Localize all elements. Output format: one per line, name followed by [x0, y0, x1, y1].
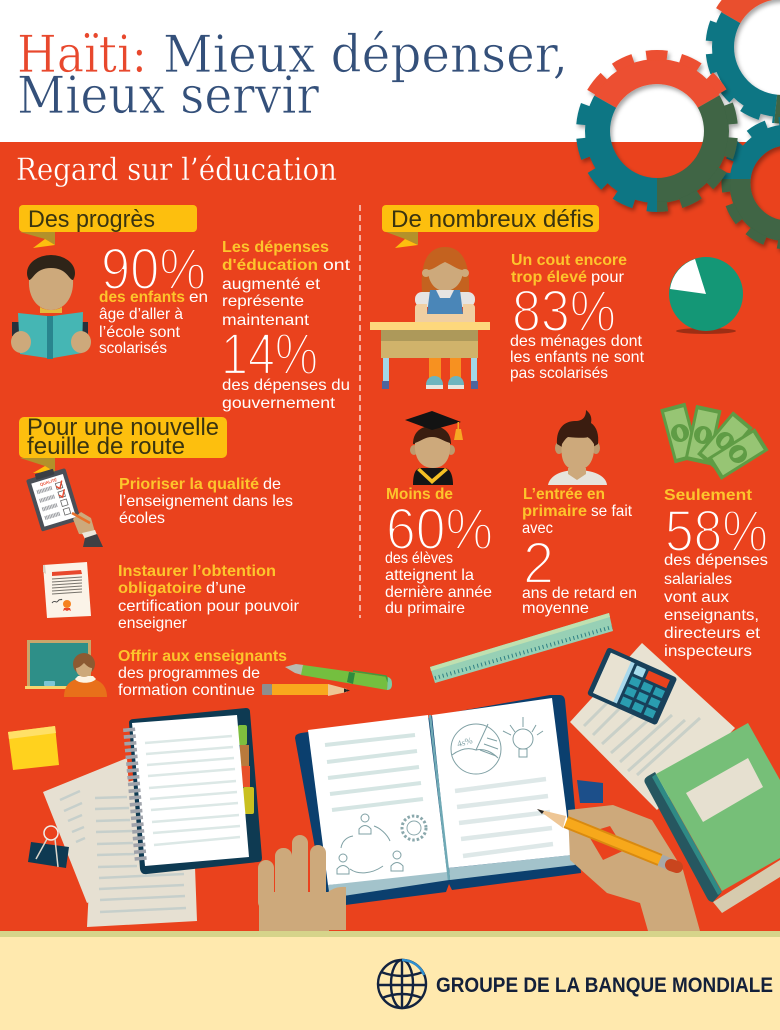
- stat: 14%: Les dépenses: [222, 239, 329, 256]
- icon: calculator: [587, 647, 677, 725]
- stat: 90%: scolarisés: [99, 340, 167, 357]
- stat: 2: se fait: [591, 503, 633, 520]
- stat: 58%: des dépenses: [664, 552, 768, 569]
- text: certification: enseigner: [118, 615, 188, 632]
- icon: green book: [644, 723, 780, 913]
- gear top right: [701, 0, 780, 128]
- gear main: [572, 46, 742, 216]
- sketch: people cycle: [337, 814, 403, 874]
- gear lower right: [718, 113, 780, 253]
- stat: 14%: gouvernement: [222, 395, 336, 412]
- stat: 14%: augmenté et: [222, 276, 321, 293]
- text: formation continue: formation continue: [118, 682, 255, 699]
- heading: Pour une nouvelle feuille de route: feuille de route: [27, 433, 185, 460]
- text: certification: certification pour pouvoir: [118, 598, 300, 615]
- stat: 58%: enseignants,: [664, 607, 759, 624]
- icon: checklist clipboard: QUALITÉ: [39, 477, 58, 487]
- stat: 60%: des élèves: [385, 550, 453, 567]
- stat: 14%: [221, 239, 351, 412]
- stat: 2: L’entrée en: [523, 486, 605, 503]
- icon: spiral notebook: [129, 708, 262, 874]
- stat: 90%: en: [189, 289, 208, 306]
- icon: teacher at blackboard: [25, 640, 107, 697]
- heading: De nombreux défis: De nombreux défis: [391, 206, 594, 233]
- stat: 58%: 58%: [665, 499, 768, 564]
- icon: girl at desk: [370, 247, 490, 389]
- stat: 60%: atteignent la: [385, 567, 474, 584]
- stat: 14%: ont: [323, 257, 351, 274]
- orange main background: [0, 142, 780, 931]
- icon: yellow pencil: [262, 684, 350, 696]
- text: priorité qualité: [119, 476, 293, 527]
- heading: Des progrès: Des progrès: [28, 206, 155, 233]
- stat: 83%: trop élevé: [511, 269, 587, 286]
- icon: left hand: [258, 835, 346, 931]
- stat: 14%: maintenant: [222, 312, 310, 329]
- stat: 58%: vont aux: [664, 589, 729, 606]
- stat: 2: primaire: [522, 503, 587, 520]
- icon: boy: [548, 410, 607, 485]
- text: certification: d’une: [206, 580, 246, 597]
- stat: 14%: d'éducation: [222, 257, 318, 274]
- stat: 90%: [99, 237, 208, 357]
- stat: 14%: représente: [222, 293, 304, 310]
- icon: boy reading: [11, 255, 91, 359]
- title: [17, 26, 568, 126]
- sketch: lightbulb: [503, 717, 543, 757]
- stat: 60%: dernière année: [385, 584, 492, 601]
- pie chart: 83%: [669, 257, 743, 334]
- stat: 58%: inspecteurs: [664, 643, 752, 660]
- text: certification: [118, 563, 300, 632]
- icon: globe: [378, 960, 426, 1008]
- stat: 60%: [385, 486, 493, 617]
- stat: 90%: âge d’aller à: [99, 306, 183, 323]
- icon: paper under calculator: [570, 643, 735, 810]
- stat: 58%: directeurs et: [664, 625, 761, 642]
- text: formation continue: Offrir aux enseignants: [118, 648, 287, 665]
- stat: 60%: Moins de: [386, 486, 453, 503]
- icon: checklist clipboard: [25, 465, 103, 547]
- icon: money: [660, 403, 769, 480]
- stat: 58%: Seulement: [664, 487, 752, 504]
- stat: 83%: pas scolarisés: [510, 365, 608, 382]
- divider: [359, 205, 361, 618]
- text: certification: Instaurer l’obtention: [118, 563, 276, 580]
- title: Haïti:: [17, 26, 147, 85]
- left page lines: [325, 735, 423, 810]
- stat: 58%: [664, 487, 768, 660]
- heading: Pour une nouvelle feuille de route: Pour une nouvelle: [27, 414, 219, 441]
- stat: 2: 2: [523, 531, 554, 596]
- text: formation continue: [118, 648, 287, 699]
- stat: 83%: pour: [591, 269, 625, 286]
- stat: 14%: des dépenses du: [222, 377, 350, 394]
- title: Mieux servir: [17, 67, 320, 126]
- icon: ruler: [430, 613, 613, 683]
- icon: green pen: [285, 664, 392, 690]
- stat: 83%: 83%: [512, 279, 616, 344]
- stat: 90%: 90%: [101, 237, 206, 302]
- stat: 2: avec: [522, 520, 553, 537]
- white header band: [0, 0, 780, 142]
- stat: 2: [522, 486, 637, 617]
- text: priorité qualité: l’enseignement dans les: [119, 493, 293, 510]
- heading: Pour une nouvelle feuille de route: [19, 414, 227, 473]
- heading: De nombreux défis: [382, 205, 599, 248]
- icon: open notebook: [295, 695, 603, 907]
- text: formation continue: des programmes de: [118, 665, 260, 682]
- stat: 2: moyenne: [522, 600, 589, 617]
- icon: gears: [572, 0, 780, 253]
- icon: loose papers: [43, 758, 197, 927]
- right page lines: [455, 779, 553, 856]
- title: Mieux dépenser,: [163, 26, 568, 85]
- stat: 60%: 60%: [386, 497, 493, 562]
- stat: 90%: l’école sont: [99, 324, 181, 341]
- footer logo: [378, 960, 773, 1008]
- stat: 83%: les enfants ne sont: [510, 349, 645, 366]
- text: priorité qualité: de: [263, 476, 281, 493]
- stat: 14%: 14%: [221, 322, 318, 387]
- stat: 83%: [510, 252, 645, 382]
- stat: 83%: Un cout encore: [511, 252, 627, 269]
- icon: graduate: [405, 411, 463, 485]
- text: certification: obligatoire: [118, 580, 202, 597]
- stat: 60%: du primaire: [385, 600, 465, 617]
- stat: 2: ans de retard en: [522, 585, 637, 602]
- icon: binder clip: [28, 826, 69, 868]
- icon: writing hand with pencil: [537, 805, 700, 931]
- icon: certificate: [43, 562, 91, 618]
- stat: 83%: des ménages dont: [510, 333, 643, 350]
- text: priorité qualité: Prioriser la qualité: [119, 476, 259, 493]
- subtitle: Regard sur l’éducation: [16, 152, 337, 188]
- sketch: pie chart: [451, 724, 501, 774]
- icon: sticky note: [8, 726, 59, 770]
- sketch: pie chart: 4s%: [456, 735, 474, 749]
- sketch: gear: [402, 816, 426, 840]
- heading: Des progrès: [19, 205, 197, 248]
- text: priorité qualité: écoles: [119, 510, 165, 527]
- stat: 58%: salariales: [664, 571, 732, 588]
- stat: 90%: des enfants: [99, 289, 185, 306]
- footer band: [0, 931, 780, 1030]
